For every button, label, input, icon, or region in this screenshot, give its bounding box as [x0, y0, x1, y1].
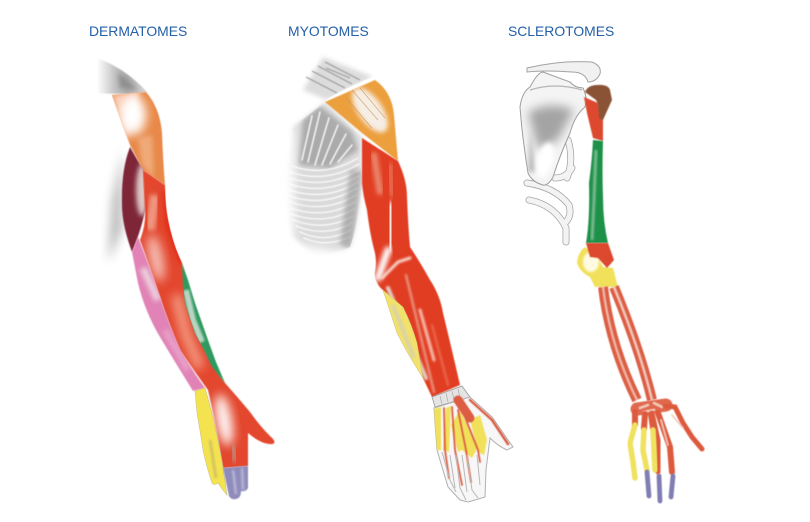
region: red arm muscles — [362, 138, 460, 397]
region: green humerus shaft — [586, 140, 608, 243]
carpals and red hand bones — [635, 403, 702, 472]
trapezius grey — [303, 57, 377, 103]
title: myotomes: MYOTOMES — [288, 23, 369, 39]
illustration: myotomes arm — [276, 57, 513, 502]
region: yellow elbow — [577, 247, 618, 287]
yellow finger bones — [630, 425, 655, 478]
region: brown humerus head — [585, 85, 612, 120]
forearm bones — [603, 287, 652, 400]
yellow tendons — [434, 406, 487, 458]
illustration: dermatomes arm — [97, 58, 274, 499]
region: purple fingertips — [223, 466, 248, 499]
ribs — [527, 140, 572, 242]
region: pink forearm — [132, 237, 205, 391]
torso shadow — [108, 150, 123, 262]
region: maroon upper arm — [122, 147, 148, 252]
hand — [434, 397, 513, 502]
title: dermatomes: DERMATOMES — [89, 23, 187, 39]
clavicle — [527, 62, 600, 82]
region: yellow forearm — [383, 290, 423, 378]
wrist band — [432, 386, 470, 407]
chest muscle grey — [290, 102, 363, 252]
scapula — [520, 72, 586, 185]
title: sclerotomes: SCLEROTOMES — [508, 23, 614, 39]
region: red arm and hand — [140, 170, 274, 468]
red tendons — [444, 400, 508, 485]
region: red elbow — [586, 243, 614, 268]
region: yellow hand edge — [195, 388, 227, 495]
region: orange shoulder — [112, 92, 165, 185]
shoulder grey — [97, 58, 147, 94]
illustration: sclerotomes skeleton — [520, 62, 702, 501]
region: red humerus head — [584, 97, 603, 141]
purple fingertips — [647, 472, 673, 501]
region: orange deltoid — [325, 80, 398, 161]
chest fade — [276, 130, 350, 270]
region: green forearm — [182, 263, 225, 383]
finger lines — [442, 452, 480, 500]
